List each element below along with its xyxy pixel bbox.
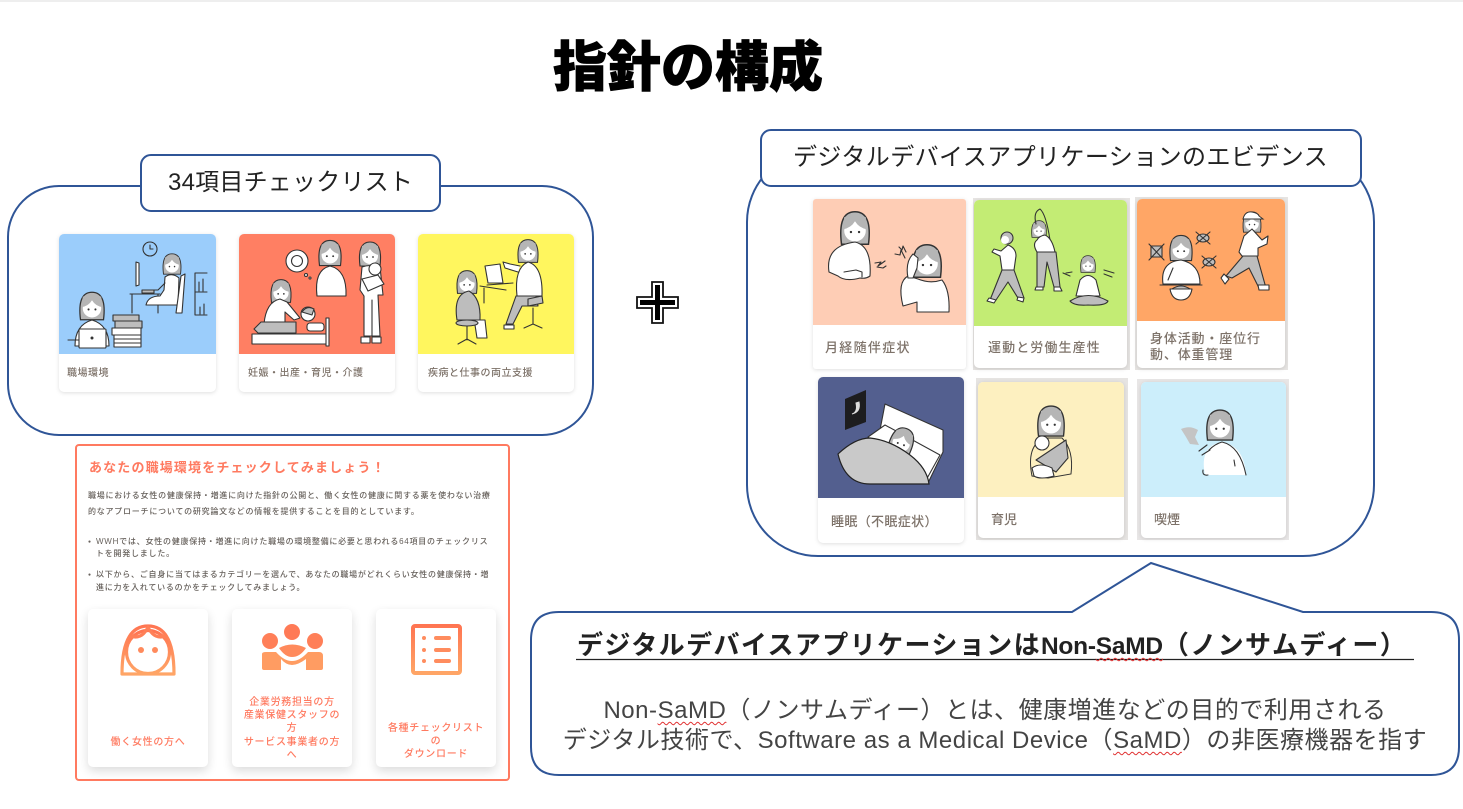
panel: your workplace check page: [75, 444, 510, 781]
card: balancing illness and work: 疾病と仕事の両立支援: [428, 368, 533, 379]
plus sign: [636, 281, 679, 324]
card: workplace environment: [59, 234, 216, 392]
card: workplace environment: 職場環境: [67, 368, 109, 379]
panel: digital device application evidence: [746, 150, 1375, 557]
heading: digital device application evidence: [760, 129, 1362, 187]
label: for company staff: 企業労務担当の方: [249, 697, 335, 708]
heading: check your workplace: あなたの職場環境をチェックしてみましょう！: [89, 460, 386, 475]
text block: bullet list: 以下から、ご自身に当てはまるカテゴリーを選んで、あなたの職場がどれくらい女性の健康保持・増: [96, 570, 489, 579]
card body: exercise and labor productivity: [974, 200, 1127, 368]
callout body text: デジタル技術で、Software as a Medical Device（SaMD）の非医療機器を指す: [563, 727, 1427, 754]
label: for company staff: へ: [287, 750, 297, 761]
card: childcare: [976, 378, 1128, 540]
card body: exercise and labor productivity: 運動と労働生産性: [988, 340, 1101, 355]
heading: digital device application evidence: デジタルデバイスアプリケーションのエビデンス: [793, 144, 1328, 171]
label: for company staff: 産業保健スタッフの: [244, 710, 340, 721]
card: menstrual symptoms: 月経随伴症状: [825, 340, 911, 355]
card: balancing illness and work: [418, 234, 574, 392]
text block: bullet list: ●: [88, 572, 92, 578]
text block: bullet list: ●: [88, 539, 92, 545]
heading: 34-item checklist: 34項目チェックリスト: [168, 169, 413, 196]
label: checklist download: 各種チェックリスト: [388, 723, 484, 734]
label: checklist download: ダウンロード: [404, 749, 468, 760]
icon: list: [411, 624, 462, 675]
card: for company staff: [232, 609, 352, 767]
card body: childcare: [978, 382, 1124, 538]
card: pregnancy, childbirth, childcare, nursing care: 妊娠・出産・育児・介護: [248, 368, 364, 379]
text block: purpose: 的なアプローチについての研究論文などの情報を提供することを目的としています。: [88, 507, 420, 516]
label: for working women: 働く女性の方へ: [111, 737, 185, 748]
text block: bullet list: [88, 537, 489, 592]
card: pregnancy, childbirth, childcare, nursing care: [239, 234, 395, 392]
card: sleep: 睡眠（不眠症状）: [831, 514, 938, 529]
card body: smoking: 喫煙: [1154, 512, 1180, 527]
text block: purpose: 職場における女性の健康保持・増進に向けた指針の公開と、働く女性の健康に関する薬を使わない治療: [88, 491, 491, 500]
card body: smoking: [1141, 382, 1286, 538]
card: checklist download: [376, 609, 496, 767]
heading: 34-item checklist: [140, 154, 441, 212]
callout body text: Non-SaMD（ノンサムディー）とは、健康増進などの目的で利用される: [603, 697, 1387, 724]
card body: physical activity and weight management: 動、体重管理: [1150, 347, 1233, 362]
icon: group of people: [262, 624, 323, 670]
callout body text: [563, 697, 1427, 756]
callout: Non-SaMD explanation: [530, 562, 1460, 776]
icon: woman face: [120, 624, 176, 676]
panel: 34-item checklist: [7, 185, 594, 436]
card body: childcare: 育児: [991, 512, 1017, 527]
text block: bullet list: トを開発しました。: [96, 549, 175, 558]
title: 指針の構成: [553, 38, 823, 98]
label: for company staff: 方: [287, 723, 297, 734]
label: for company staff: [244, 696, 340, 761]
card: menstrual symptoms: [813, 199, 966, 369]
card: exercise and labor productivity: [973, 198, 1130, 370]
card body: physical activity and weight management: 身体活動・座位行: [1150, 331, 1261, 346]
card: sleep: [818, 377, 964, 543]
label: for company staff: サービス事業者の方: [244, 737, 340, 748]
text block: bullet list: 進に力を入れているのかをチェックしてみましょう。: [96, 583, 305, 592]
text block: purpose: [88, 491, 491, 516]
card: smoking: [1137, 379, 1289, 540]
text block: bullet list: WWHでは、女性の健康保持・増進に向けた職場の環境整備に必要と思われる64項目のチェックリス: [96, 537, 488, 546]
card body: physical activity and weight management: [1137, 199, 1285, 368]
card: for working women: [88, 609, 208, 767]
callout bubble: [530, 562, 1460, 776]
card: physical activity and weight management: [1135, 197, 1288, 370]
callout heading: デジタルデバイスアプリケーションはNon-SaMD（ノンサムディー）: [577, 630, 1407, 660]
label: checklist download: の: [431, 736, 441, 747]
label: checklist download: [388, 722, 484, 760]
